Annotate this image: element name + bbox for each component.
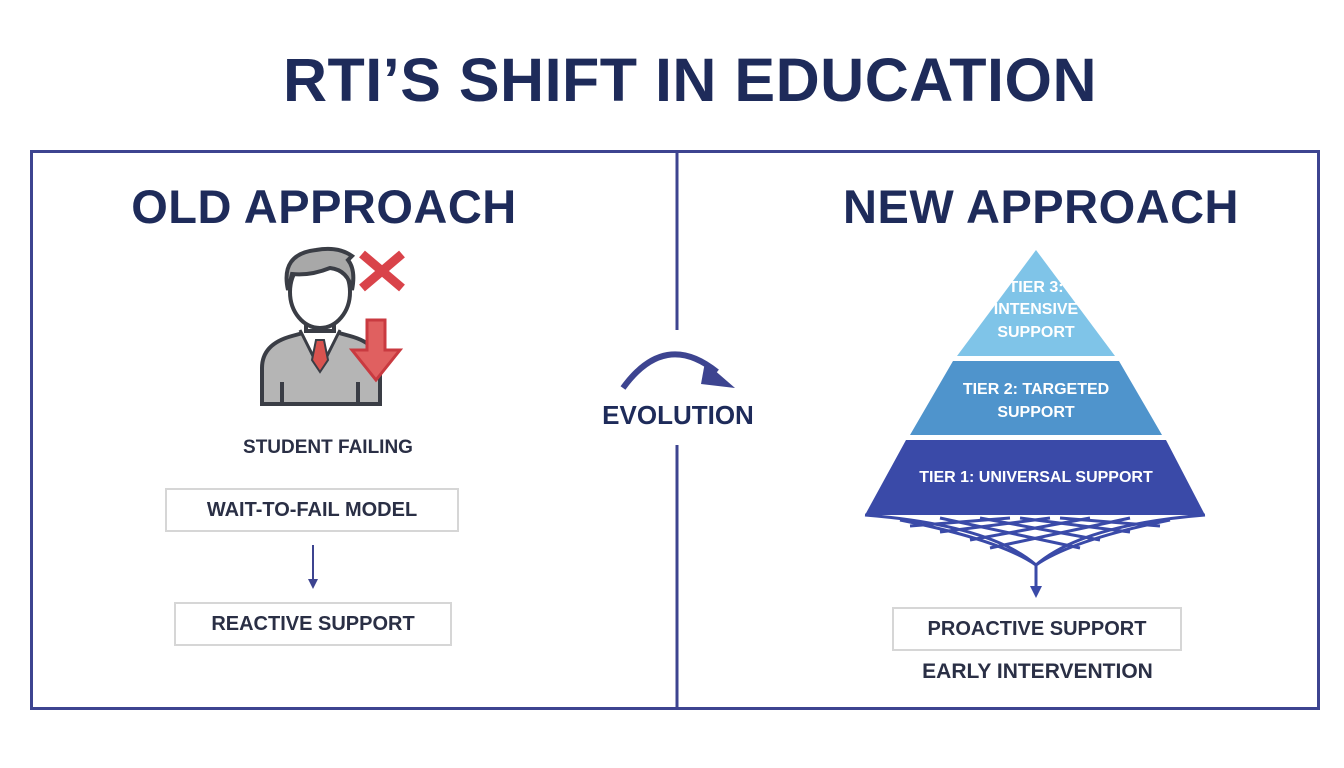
box: reactive support bbox=[174, 602, 452, 646]
pyramid: TIER 3: bbox=[1008, 279, 1064, 296]
pyramid: SUPPORT bbox=[997, 404, 1075, 421]
panel: old approach bbox=[131, 180, 517, 646]
box: proactive support: PROACTIVE SUPPORT bbox=[928, 618, 1146, 640]
box: wait-to-fail: WAIT-TO-FAIL MODEL bbox=[207, 499, 417, 521]
label: early intervention: EARLY INTERVENTION bbox=[922, 660, 1153, 683]
label: student failing: STUDENT FAILING bbox=[243, 437, 413, 458]
red x bbox=[362, 254, 402, 288]
pyramid: INTENSIVE bbox=[994, 301, 1079, 318]
icon: failing student bbox=[260, 246, 405, 406]
pyramid bbox=[864, 250, 1206, 598]
frame bbox=[30, 150, 1320, 710]
label: evolution: EVOLUTION bbox=[602, 400, 754, 430]
box: wait-to-fail bbox=[165, 488, 459, 532]
pyramid: TIER 2: TARGETED bbox=[963, 381, 1109, 398]
heading: old approach: OLD APPROACH bbox=[131, 180, 517, 233]
icon: curved arrow bbox=[620, 351, 735, 390]
red down arrow bbox=[352, 320, 400, 380]
box: reactive support: REACTIVE SUPPORT bbox=[211, 613, 415, 635]
pyramid: SUPPORT bbox=[997, 324, 1075, 341]
evolution arrow bbox=[602, 351, 754, 430]
pyramid: TIER 1: UNIVERSAL SUPPORT bbox=[919, 469, 1153, 486]
arrow bbox=[308, 545, 318, 589]
heading: new approach: NEW APPROACH bbox=[843, 180, 1239, 233]
box: proactive support bbox=[892, 607, 1182, 651]
title: RTI’S SHIFT IN EDUCATION bbox=[283, 46, 1097, 114]
panel: new approach bbox=[843, 180, 1239, 683]
divider bbox=[676, 153, 678, 707]
